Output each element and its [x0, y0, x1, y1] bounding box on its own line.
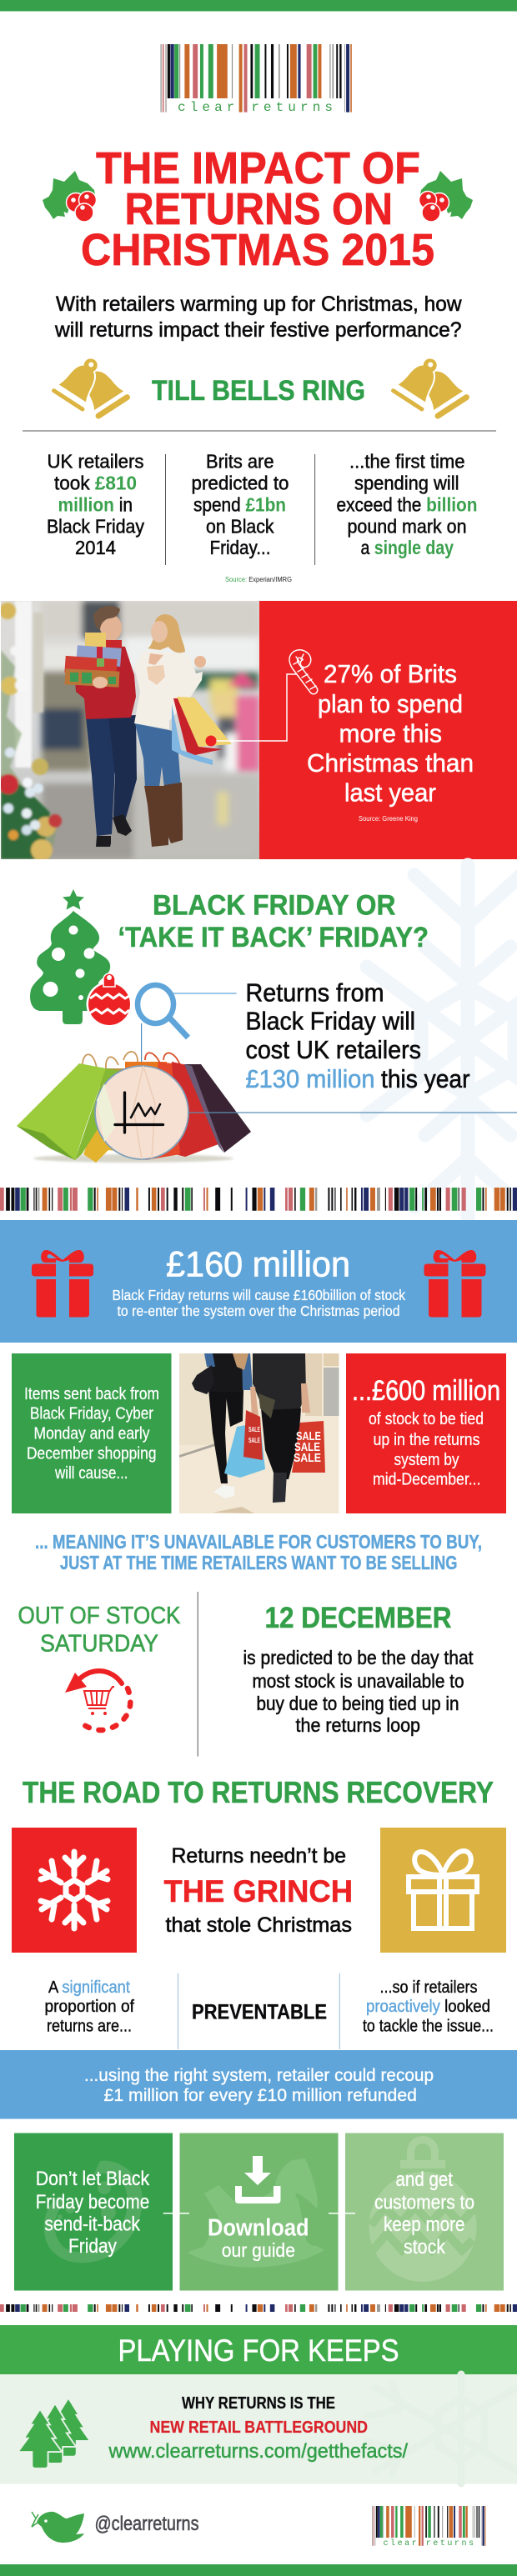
title: CHRISTMAS 2015: [81, 225, 434, 275]
heading: black friday: [118, 890, 429, 953]
panel: recoup band: ...using the right system, retailer could recoup: [84, 2065, 434, 2085]
panel: new retail battleground: [0, 2374, 517, 2483]
text: so if retailers: to tackle the issue...: [363, 2017, 494, 2035]
heading: till bells ring: TILL BELLS RING: [152, 375, 365, 407]
source: Greene King: Source: Greene King: [359, 814, 418, 823]
shopping bags: [172, 704, 213, 765]
stat column 1: UK retailers: [47, 450, 143, 472]
text: the grinch: [163, 1844, 353, 1937]
photo: women with sale bags: SALE: [294, 1440, 320, 1454]
panel: £600 million: mid-December...: [373, 1470, 480, 1488]
text: 27% of Brits plan to spend more: plan to spend: [318, 689, 463, 718]
stat column 2: on Black: [206, 515, 274, 537]
panel: items sent back: December shopping: [27, 1443, 157, 1463]
callout connector line: [205, 674, 299, 747]
stat column 1: million in: [58, 493, 133, 515]
barcode strip: [0, 1188, 517, 1211]
panel: don't let black friday: Friday become: [36, 2191, 149, 2213]
panel: £160 million: £160 million: [166, 1245, 350, 1285]
stat column 2: Friday...: [210, 537, 270, 558]
title: RETURNS ON: [125, 184, 393, 234]
text: returns from black friday: Returns from: [245, 978, 384, 1007]
panel: download our guide: our guide: [222, 2239, 295, 2261]
text: so if retailers: proactively looked: [366, 1997, 490, 2016]
panel: £160 million: Black Friday returns will cause £160billion of stock: [112, 1287, 405, 1303]
stat column 2: spend £1bn: [193, 493, 286, 515]
woman: [135, 723, 181, 788]
panel: £160 million: [0, 1220, 517, 1343]
text: predicted day: the returns loop: [295, 1714, 420, 1736]
text: 27% of Brits plan to spend more: last year: [344, 778, 436, 807]
logo: clear returns barcode: clear returns: [178, 100, 333, 115]
subheading: [54, 293, 462, 342]
text: so if retailers: ...so if retailers: [380, 1978, 477, 1997]
panel: download our guide: Download: [208, 2215, 309, 2242]
heading band: playing for keeps: PLAYING FOR KEEPS: [118, 2333, 399, 2368]
background snowflake: [367, 865, 517, 1217]
text: 27% of Brits plan to spend more: [307, 659, 474, 807]
icon: twitter bird: [32, 2512, 84, 2543]
text: 27% of Brits plan to spend more: Christmas than: [307, 748, 474, 778]
left woman: [208, 1389, 228, 1483]
tree bokeh: [0, 603, 62, 861]
heading: black friday: BLACK FRIDAY OR: [153, 890, 395, 922]
heading: out of stock saturday: SATURDAY: [40, 1630, 158, 1657]
top green bar: [0, 0, 517, 12]
text: preventable: PREVENTABLE: [192, 2000, 327, 2023]
heading: black friday: ‘TAKE IT BACK’ FRIDAY?: [118, 922, 429, 953]
icon: red gift right: [424, 1250, 485, 1317]
panel: new retail battleground: www.clearreturns.com/getthefacts/: [108, 2440, 408, 2463]
red sale bag large: [292, 1421, 325, 1473]
text: predicted day: [243, 1647, 474, 1736]
text: predicted day: is predicted to be the day that: [243, 1647, 474, 1668]
panel: £600 million: [346, 1353, 506, 1513]
text: predicted day: most stock is unavailable to: [252, 1670, 464, 1692]
text: a significant proportion: [45, 1978, 134, 2035]
photo: couple shopping: [0, 601, 259, 861]
text: @clearreturns: @clearreturns: [95, 2513, 198, 2535]
stat column 1: Black Friday: [47, 515, 144, 537]
panel: gold gift square: [380, 1828, 506, 1953]
text: 27% of Brits plan to spend more: 27% of Brits: [324, 659, 457, 688]
stat column 3: pound mark on: [347, 515, 467, 537]
panel: £600 million: system by: [394, 1450, 459, 1469]
stat column 3: exceed the billion: [337, 493, 477, 515]
panel: £160 million: to re-enter the system over the Christmas period: [117, 1303, 400, 1319]
heading: out of stock saturday: [18, 1603, 180, 1657]
callout: meaning unavailable: [35, 1531, 482, 1573]
icon: bells left: [50, 349, 131, 420]
title: THE IMPACT OF: [96, 143, 420, 193]
panel: don't let black friday: Friday: [68, 2235, 117, 2258]
stat column 2: predicted to: [192, 472, 289, 493]
photo: women with sale bags: [179, 1353, 339, 1513]
text: a significant proportion: A significant: [48, 1978, 130, 1997]
panel: red callout: [259, 601, 517, 859]
subheading: With retailers warming up for Christmas, how: [56, 293, 462, 316]
photo: women with sale bags: SALE: [248, 1426, 260, 1433]
logo: footer barcode: [372, 2506, 485, 2548]
stat column 3: a single day: [360, 537, 454, 558]
panel: new retail battleground: NEW RETAIL BATTLEGROUND: [150, 2418, 368, 2437]
icon: holly right: [419, 171, 473, 222]
icon: holly left: [43, 171, 97, 222]
panel: items sent back: Items sent back from: [24, 1384, 159, 1403]
panel: keep more stock: keep more: [384, 2213, 465, 2236]
panel: £600 million: of stock to be tied: [369, 1409, 484, 1428]
text: a significant proportion: returns are...: [47, 2017, 132, 2035]
icon: red bauble: [87, 973, 132, 1027]
icon: christmas tree: [30, 889, 110, 1024]
panel: items sent back: Monday and early: [33, 1423, 150, 1443]
right woman: [261, 1408, 301, 1479]
stat column 1: 2014: [75, 537, 116, 558]
shopping bags with lens: [17, 1052, 251, 1163]
icon: red gift left: [32, 1250, 93, 1317]
heading: out of stock saturday: OUT OF STOCK: [18, 1603, 180, 1629]
red sale bag: [243, 1410, 263, 1460]
text: the grinch: THE GRINCH: [163, 1874, 353, 1908]
title: [81, 143, 434, 275]
panel: download our guide: [180, 2133, 339, 2290]
stat column 2: Brits are: [206, 450, 274, 472]
panel: keep more stock: [345, 2133, 504, 2290]
stat column 3: [337, 450, 477, 558]
panel: recoup band: £1 million for every £10 million refunded: [103, 2085, 417, 2105]
text: returns from black friday: cost UK retailers: [245, 1035, 421, 1064]
panel: don't let black friday: [14, 2133, 173, 2290]
text: so if retailers: [363, 1978, 494, 2035]
photo: women with sale bags: SALE: [294, 1451, 321, 1465]
heading: 12 december: 12 DECEMBER: [265, 1602, 452, 1634]
text: returns from black friday: £130 million: [245, 1064, 375, 1093]
text: returns from black friday: this year: [381, 1064, 470, 1093]
stat column 2: [192, 450, 289, 558]
stat column 3: spending will: [354, 472, 459, 493]
stat column 1: [47, 450, 144, 558]
photo: women with sale bags: SALE: [296, 1429, 321, 1443]
text: the grinch: Returns needn’t be: [172, 1844, 346, 1868]
photo: women with sale bags: SALE: [248, 1437, 260, 1444]
panel: don't let black friday: send-it-back: [44, 2213, 141, 2235]
panel: keep more stock: and get: [395, 2168, 453, 2191]
icon: returns cart: [65, 1671, 130, 1730]
text: the grinch: that stole Christmas: [165, 1913, 352, 1937]
text: returns from black friday: Black Friday will: [245, 1007, 415, 1035]
icon: candy cane: [294, 654, 316, 690]
gifts: [85, 633, 106, 649]
blue bag: [224, 1423, 265, 1478]
stat column 1: took £810: [54, 472, 137, 493]
text: 27% of Brits plan to spend more: more this: [339, 718, 442, 748]
source: Experian/IMRG: Source: Experian/IMRG: [225, 576, 292, 583]
panel: items sent back: will cause...: [54, 1463, 128, 1483]
panel: don't let black friday: Don’t let Black: [36, 2168, 150, 2190]
panel: new retail battleground: WHY RETURNS IS THE: [182, 2393, 335, 2413]
icon: forest trees: [18, 2399, 88, 2468]
panel: recoup band: [0, 2050, 517, 2118]
subheading: will returns impact their festive performance?: [54, 318, 461, 342]
panel: £600 million: up in the returns: [374, 1430, 480, 1449]
text: a significant proportion: proportion of: [45, 1997, 134, 2016]
icon: bells right: [389, 349, 470, 420]
barcode strip: [0, 2304, 517, 2312]
icon: magnifying glass: [138, 985, 237, 1067]
text: predicted day: buy due to being tied up in: [257, 1693, 459, 1714]
logo: footer barcode: clear returns: [384, 2538, 474, 2548]
stat column 3: ...the first time: [349, 450, 465, 472]
bottom green bar: [0, 2564, 517, 2576]
heading band: playing for keeps: [0, 2325, 517, 2374]
man: [86, 717, 117, 836]
text: returns from black friday: [245, 978, 470, 1093]
panel: keep more stock: stock: [404, 2236, 446, 2258]
panel: items sent back: Black Friday, Cyber: [30, 1403, 153, 1423]
panel: keep more stock: customers to: [374, 2192, 474, 2213]
panel: red snowflake square: [12, 1828, 137, 1953]
panel: items sent back: [12, 1353, 172, 1513]
logo: clear returns barcode: [160, 44, 352, 115]
